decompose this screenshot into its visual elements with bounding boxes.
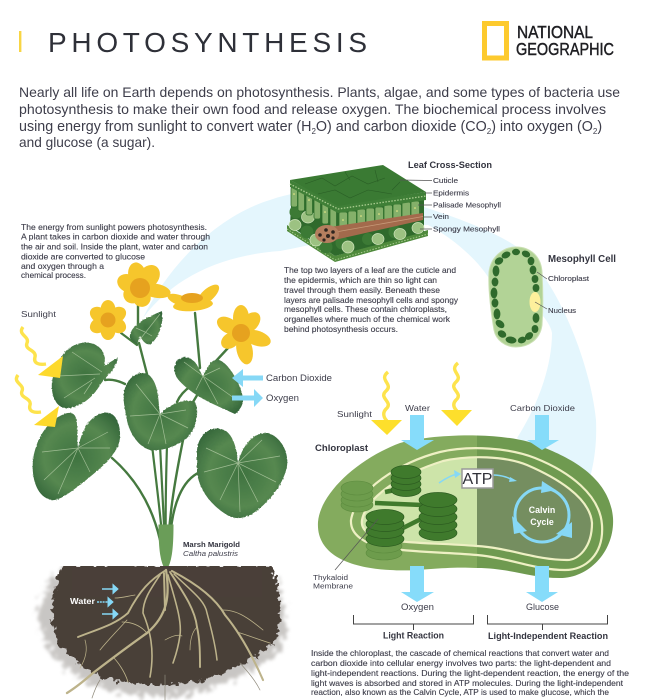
chloroplast carbon dioxide label: Carbon Dioxide bbox=[510, 403, 575, 413]
plant name label: Marsh Marigold bbox=[183, 540, 240, 549]
thylakoid membrane label bbox=[313, 573, 353, 590]
leaf explanation text: travel through them easily. Beneath these bbox=[284, 286, 440, 295]
outer membrane bbox=[318, 435, 477, 570]
intro paragraph: ) into oxygen (O bbox=[491, 119, 593, 135]
plant explanation text: dioxide are converted to glucose bbox=[21, 252, 145, 262]
intro paragraph: O) and carbon dioxide (CO bbox=[316, 119, 487, 135]
leaf explanation text: The top two layers of a leaf are the cuticle and bbox=[284, 266, 456, 275]
upper epidermis bbox=[290, 180, 426, 213]
intro paragraph: photosynthesis to make their own food and release oxygen. The biochemical process involves bbox=[19, 102, 606, 117]
cuticle surface bbox=[290, 165, 426, 206]
chloroplast label: Chloroplast bbox=[548, 274, 589, 283]
leaf cross-section heading: Leaf Cross-Section bbox=[408, 160, 492, 171]
lower epidermis bbox=[287, 225, 428, 262]
leader lines bbox=[400, 180, 432, 229]
plant name label bbox=[183, 540, 240, 558]
ghost thylakoid stacks bbox=[341, 481, 402, 560]
water arrow into chloroplast bbox=[401, 415, 434, 450]
oxygen output label: Oxygen bbox=[401, 602, 434, 612]
leader lines bbox=[535, 272, 547, 309]
intro paragraph bbox=[19, 85, 620, 150]
thylakoid leader line bbox=[335, 519, 378, 570]
water label: Water bbox=[70, 596, 96, 606]
mesophyll cell diagram bbox=[489, 247, 547, 347]
leaf explanation text: mesophyll cells. These contain chloroplasts, bbox=[284, 305, 447, 314]
reaction explanation text: Inside the chloroplast, the cascade of chemical reactions that convert water and bbox=[311, 649, 609, 658]
sunlight label: Sunlight bbox=[21, 309, 57, 319]
leaf explanation text: the epidermis, which are thin so light can bbox=[284, 276, 437, 285]
chloroplasts bbox=[491, 249, 539, 344]
soil with halo bbox=[38, 565, 286, 697]
outer ring bbox=[351, 448, 602, 570]
mesophyll cell heading: Mesophyll Cell bbox=[548, 254, 616, 265]
nucleus label: Nucleus bbox=[548, 306, 576, 315]
light reaction bracket bbox=[354, 615, 474, 630]
logo wordmark: NATIONAL bbox=[517, 22, 593, 42]
reaction explanation text: light-independent reactions. During the light-dependent reaction, the energy of the bbox=[311, 669, 629, 678]
carbon dioxide label: Carbon Dioxide bbox=[266, 373, 332, 383]
intro paragraph: 2 bbox=[487, 127, 492, 136]
flowers bbox=[87, 261, 273, 366]
leaf explanation text: layers are palisade mesophyll cells and spongy bbox=[284, 296, 458, 305]
leaves bbox=[33, 311, 287, 518]
carbon dioxide arrow into chloroplast bbox=[527, 415, 559, 450]
accent bar bbox=[19, 31, 21, 52]
nucleus bbox=[530, 292, 540, 312]
cell body bbox=[489, 247, 543, 347]
reaction explanation text: carbon dioxide into cellular energy involves two parts: the light-dependent and bbox=[311, 659, 611, 668]
vein bbox=[330, 213, 423, 241]
plant explanation text: A plant takes in carbon dioxide and water through bbox=[21, 232, 210, 242]
thylakoid membrane label: Thykaloid bbox=[313, 573, 348, 582]
light-independent reaction bracket bbox=[488, 615, 608, 630]
Calvin cycle: Calvin bbox=[529, 505, 555, 515]
cuticle label: Cuticle bbox=[433, 176, 458, 185]
glucose arrow out of chloroplast bbox=[526, 566, 558, 602]
chloroplast sunlight label: Sunlight bbox=[337, 409, 373, 419]
plant explanation text bbox=[21, 223, 210, 280]
soil and roots bbox=[38, 565, 286, 700]
plant explanation text: and oxygen through a bbox=[21, 262, 105, 271]
cell nuclei dots bbox=[293, 193, 416, 221]
reaction explanation text: reaction, also known as the Calvin Cycle, ATP is used to make glucose, which the bbox=[311, 688, 609, 697]
thylakoid stacks bbox=[366, 466, 457, 546]
plant explanation text: the air and soil. Inside the plant, water and carbon bbox=[21, 242, 208, 252]
intro paragraph: and glucose (a sugar). bbox=[19, 135, 155, 150]
stems bbox=[105, 303, 228, 570]
water arrows into the roots bbox=[97, 584, 118, 618]
intro paragraph: Nearly all life on Earth depends on photosynthesis. Plants, algae, and some types of bacteria use bbox=[19, 85, 620, 100]
intro paragraph: ) bbox=[597, 119, 602, 135]
vein label: Vein bbox=[433, 212, 449, 221]
oxygen arrow out of chloroplast bbox=[401, 566, 434, 602]
leaf explanation text: organelles where much of the chemical work bbox=[284, 315, 450, 324]
palisade label: Palisade Mesophyll bbox=[433, 200, 501, 210]
logo rectangle bbox=[484, 24, 506, 58]
Calvin cycle: Cycle bbox=[530, 517, 554, 527]
reaction explanation text bbox=[311, 649, 629, 697]
leaf explanation text bbox=[284, 266, 458, 334]
intro paragraph: 2 bbox=[311, 127, 316, 136]
title text: PHOTOSYNTHESIS bbox=[48, 27, 367, 58]
spongy label: Spongy Mesophyll bbox=[433, 224, 500, 234]
plant explanation text: chemical process. bbox=[21, 271, 86, 280]
reaction explanation text: light waves is absorbed and stored in ATP molecules. During the light-independent bbox=[311, 679, 624, 688]
light reaction label: Light Reaction bbox=[383, 630, 444, 640]
sunlight arrows to plant bbox=[16, 327, 63, 427]
chloroplast heading: Chloroplast bbox=[315, 443, 369, 454]
chloroplast diagram bbox=[318, 435, 613, 578]
carbon dioxide and oxygen arrows at the leaf bbox=[232, 369, 263, 407]
National Geographic logo: GEOGRAPHIC bbox=[516, 39, 614, 59]
thylakoid connectors bbox=[375, 490, 423, 528]
inner region bbox=[362, 458, 477, 545]
chloroplast water label: Water bbox=[405, 403, 430, 413]
marsh marigold plant bbox=[33, 261, 287, 570]
glucose output label: Glucose bbox=[526, 602, 559, 612]
plant explanation text: The energy from sunlight powers photosynthesis. bbox=[21, 223, 207, 232]
epidermis label: Epidermis bbox=[433, 188, 469, 198]
light-independent reaction label: Light-Independent Reaction bbox=[488, 631, 608, 641]
National Geographic logo bbox=[484, 22, 614, 59]
palisade cells bbox=[291, 187, 420, 233]
light blue swoosh connecting plant, leaf and chloroplast bbox=[143, 190, 596, 478]
spongy layer bbox=[290, 186, 424, 256]
oxygen label: Oxygen bbox=[266, 393, 299, 403]
leaf explanation text: behind photosynthesis occurs. bbox=[284, 325, 398, 334]
leaf cross-section diagram bbox=[287, 165, 428, 262]
leaf veins bbox=[42, 314, 280, 512]
leaf layer labels bbox=[400, 176, 501, 234]
intro paragraph: 2 bbox=[593, 127, 598, 136]
thylakoid membrane label: Membrane bbox=[313, 582, 353, 590]
roots bbox=[67, 570, 270, 700]
ATP label: ATP bbox=[463, 471, 492, 488]
Calvin cycle bbox=[512, 481, 572, 542]
chloroplast sunlight arrows bbox=[371, 363, 472, 435]
intro paragraph: using energy from sunlight to convert water (H bbox=[19, 119, 311, 135]
ATP flow arrows bbox=[439, 474, 514, 483]
plant name label: Caltha palustris bbox=[183, 549, 238, 558]
